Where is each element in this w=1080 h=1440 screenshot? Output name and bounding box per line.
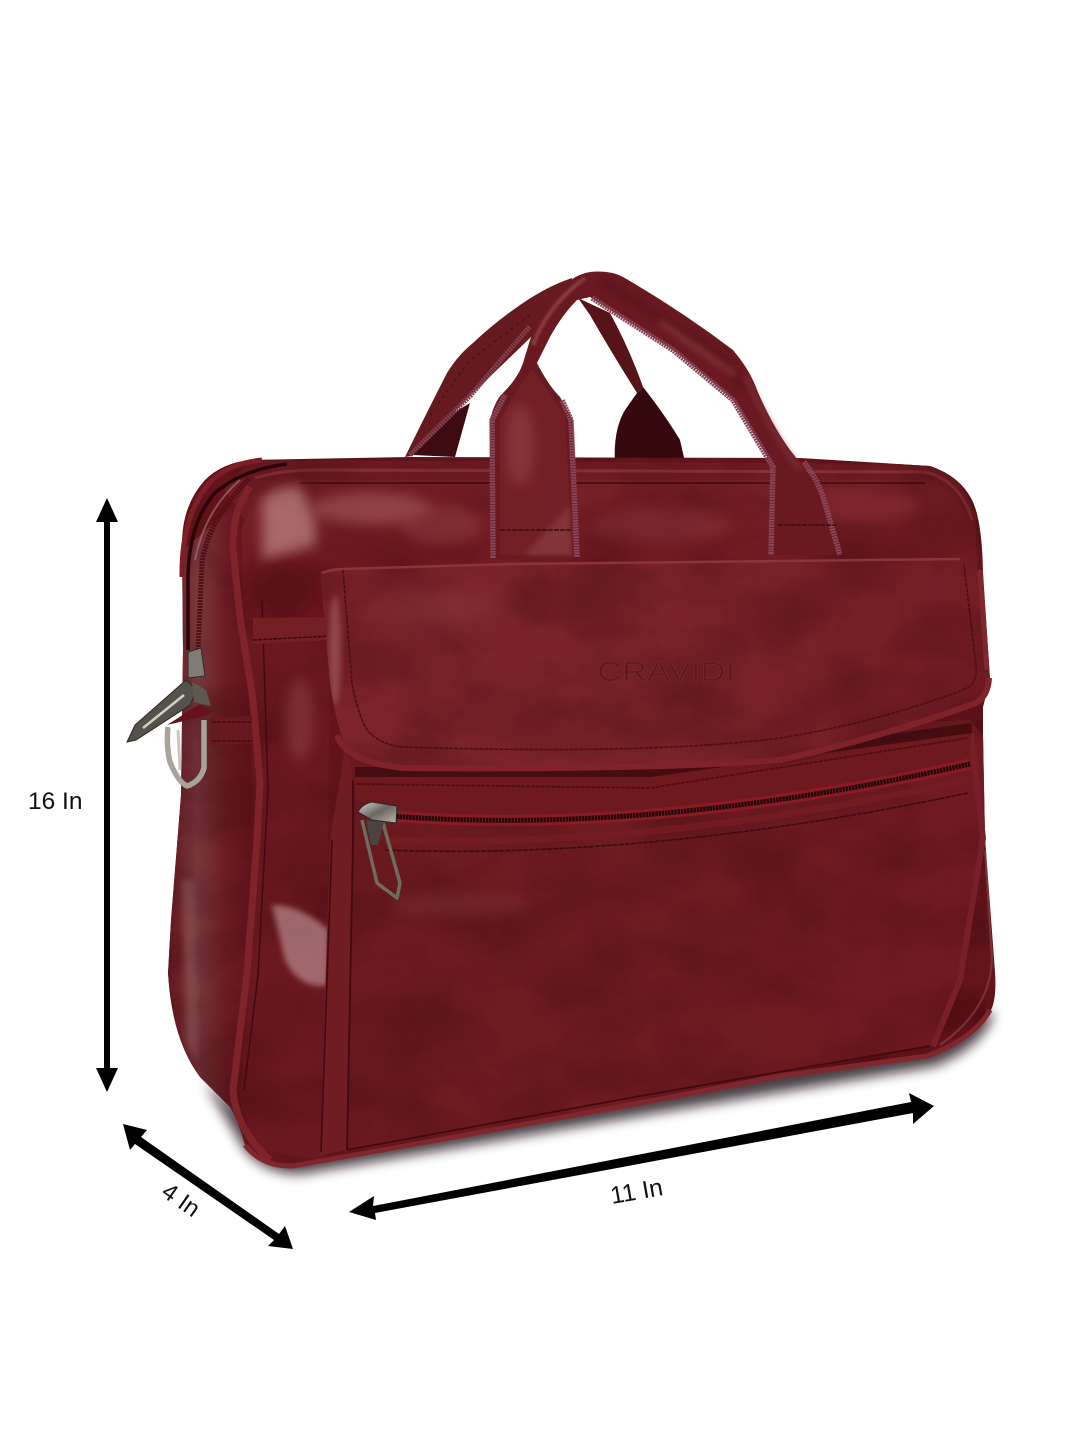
cross strap <box>253 617 330 644</box>
highlights <box>272 905 329 986</box>
front handle <box>490 272 840 560</box>
side strap tab <box>210 716 252 746</box>
top panel <box>240 478 980 620</box>
right side piping <box>933 727 983 1046</box>
front vertical band <box>320 748 353 1155</box>
label: depth: 4 In <box>157 1178 205 1223</box>
arrow: width <box>349 1093 934 1220</box>
side gloss streak <box>195 480 240 560</box>
bag body <box>160 440 1010 1180</box>
label: height: 16 In <box>28 788 82 815</box>
lower side panel <box>240 640 330 1160</box>
bottom piping <box>245 1010 990 1166</box>
handle gloss <box>500 370 572 555</box>
back handle left strap <box>405 278 572 457</box>
ground shadow <box>205 1012 994 1174</box>
embossed logo: CRAVIDI <box>597 656 735 687</box>
side zipper track <box>188 464 287 650</box>
D ring <box>167 720 204 786</box>
flap stitching <box>343 565 976 750</box>
soft texture under highlights <box>168 457 994 1120</box>
infographic: bag with dimensions <box>30 272 1001 1249</box>
side hardware <box>127 648 252 786</box>
upper rim <box>225 460 978 520</box>
side panel <box>168 514 244 1124</box>
back handle right strap <box>578 298 685 463</box>
arrow: depth <box>123 1124 293 1249</box>
label: width: 11 In <box>608 1174 665 1210</box>
pocket band above zipper <box>352 725 972 820</box>
side zipper fabric edge <box>182 460 262 577</box>
zip pull <box>127 680 197 742</box>
pocket seam below zipper <box>385 780 968 841</box>
arrow: height <box>96 498 118 1092</box>
flap piping <box>322 559 960 573</box>
handle ribbing <box>492 298 840 558</box>
zipper pull <box>358 802 400 898</box>
side piping <box>233 487 270 1160</box>
front pocket panel <box>245 720 992 1166</box>
front flap <box>310 550 1000 780</box>
front zipper <box>390 764 970 820</box>
